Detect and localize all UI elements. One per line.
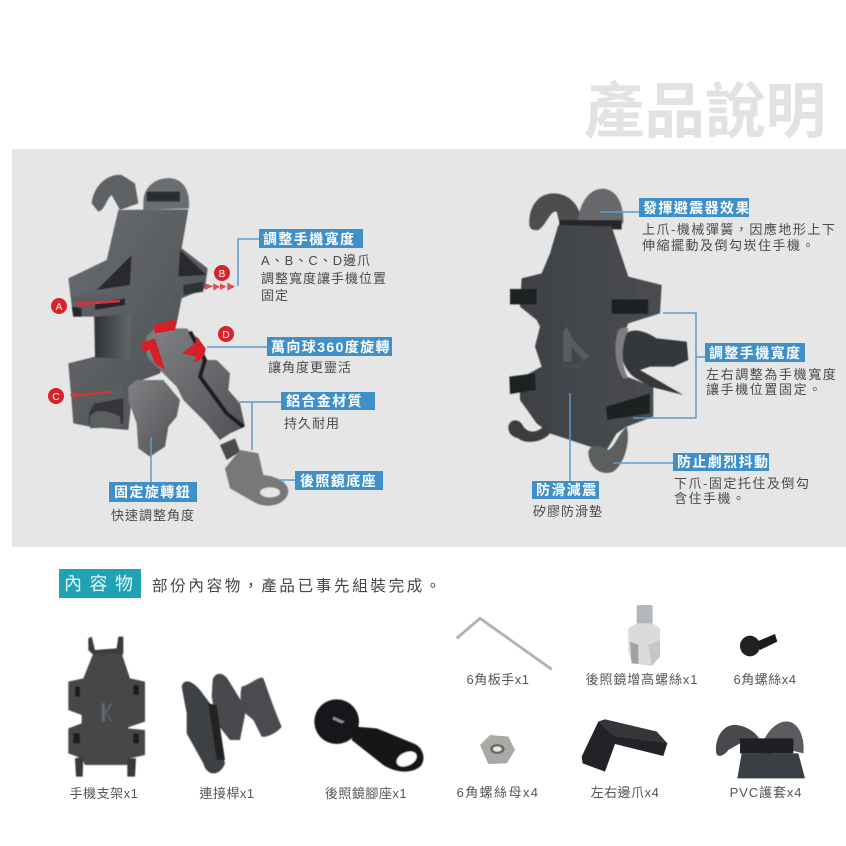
item: hex screw	[734, 634, 796, 687]
item: connecting arm	[182, 674, 282, 801]
panel: product description	[12, 149, 846, 547]
item: side claw	[582, 719, 667, 800]
callout: adjust phone width (right): 調整手機寬度	[709, 345, 801, 361]
callout: adjust phone width (right): 左右調整為手機寬度	[706, 367, 837, 382]
item: hex wrench	[457, 618, 552, 687]
callout: locking knob: 快速調整角度	[111, 508, 195, 523]
marker A: A	[56, 302, 63, 313]
item: phone holder	[68, 637, 145, 801]
callout: anti-vibration: 下爪-固定托住及倒勾	[674, 476, 810, 491]
right product photo: phone holder back view	[508, 189, 688, 473]
caption: 6角板手x1	[467, 672, 529, 687]
callout: anti-vibration: 含住手機。	[674, 491, 747, 506]
callout: aluminium alloy	[237, 392, 375, 450]
marker D	[218, 326, 234, 342]
callout: aluminium alloy: 持久耐用	[284, 416, 340, 431]
callout: adjust phone width (left): A、B、C、D邊爪	[261, 253, 371, 268]
caption: 後照鏡腳座x1	[325, 786, 407, 801]
callout: anti-vibration: 防止劇烈抖動	[677, 454, 769, 470]
heading: contents	[59, 569, 141, 598]
rotation and width arrows	[70, 283, 235, 399]
caption: 6角螺絲x4	[734, 672, 796, 687]
caption: 6角螺絲母x4	[457, 785, 539, 800]
callout: adjust phone width (left): 固定	[261, 288, 289, 303]
callout: 360 degree ball: 萬向球360度旋轉	[271, 339, 391, 355]
callout: 360 degree ball	[207, 337, 392, 375]
callout: adjust phone width (right): 讓手機位置固定。	[706, 382, 823, 397]
marker C: C	[52, 392, 60, 403]
item: extension bolt	[586, 605, 698, 687]
callout: shock absorber: 伸縮擺動及倒勾崁住手機。	[642, 238, 816, 253]
item: mirror mount ball	[314, 699, 423, 801]
marker B: B	[219, 269, 226, 280]
callout: adjust phone width (left): 調整手機寬度	[263, 231, 355, 247]
caption: 後照鏡增高螺絲x1	[586, 672, 698, 687]
right product photo: phone holder back view: KTnet	[563, 363, 583, 370]
callout: locking knob	[109, 437, 197, 523]
marker A	[51, 298, 67, 314]
callout: shock absorber: 發揮避震器效果	[643, 200, 751, 216]
callout: anti-vibration	[613, 453, 810, 506]
item: PVC cover	[716, 722, 805, 800]
callout: anti-slip pad: 矽膠防滑墊	[533, 504, 603, 519]
callout: locking knob: 固定旋轉鈕	[114, 484, 191, 500]
callout: adjust phone width (left): 調整寬度讓手機位置	[261, 271, 387, 286]
callout: anti-slip pad: 防滑減震	[536, 482, 598, 498]
title: 產品說明	[584, 77, 826, 145]
marker B	[214, 265, 230, 281]
marker D: D	[222, 330, 230, 341]
caption: PVC護套x4	[730, 785, 802, 800]
callout: adjust phone width (left)	[238, 229, 387, 303]
callout: adjust phone width (right)	[633, 313, 837, 418]
callout: mirror base: 後照鏡底座	[300, 473, 377, 489]
contents note: 部份內容物，產品已事先組裝完成。	[152, 577, 443, 595]
callout: anti-slip pad	[532, 393, 603, 519]
item: hex nut	[457, 735, 539, 800]
caption: 左右邊爪x4	[591, 785, 659, 800]
callout: 360 degree ball: 讓角度更靈活	[268, 360, 352, 375]
marker C	[48, 388, 64, 404]
callout: shock absorber	[600, 198, 836, 253]
callout: aluminium alloy: 鋁合金材質	[286, 393, 363, 409]
callout: mirror base	[280, 471, 383, 490]
caption: 連接桿x1	[199, 786, 255, 801]
left product photo: phone holder with arm	[68, 175, 288, 506]
heading: contents: 內容物	[64, 574, 140, 594]
callout: shock absorber: 上爪-機械彈簧，因應地形上下	[642, 222, 836, 237]
caption: 手機支架x1	[70, 786, 138, 801]
